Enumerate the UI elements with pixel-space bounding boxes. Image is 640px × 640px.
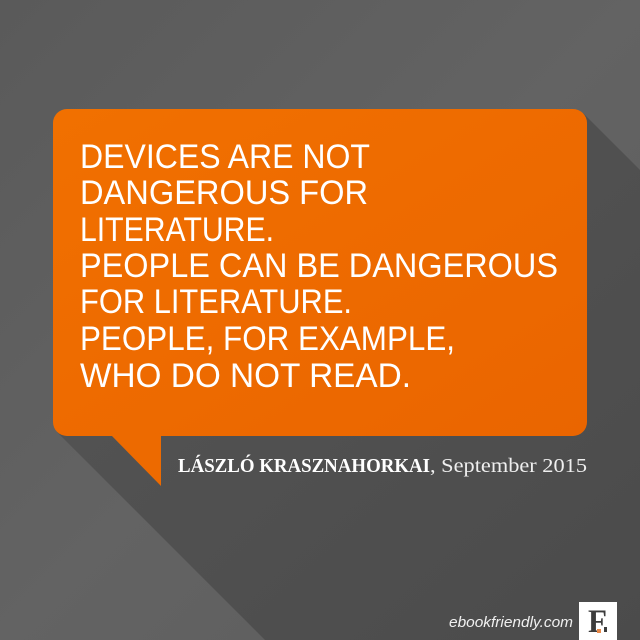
quote text: DANGEROUS FOR — [80, 174, 368, 212]
quote text: FOR LITERATURE. — [80, 283, 352, 321]
attribution: , September 2015 — [430, 455, 587, 477]
logo: F — [588, 604, 607, 640]
site name: ebookfriendly.com — [449, 614, 573, 631]
long shadow of speech bubble — [57, 113, 640, 640]
attribution: LÁSZLÓ KRASZNAHORKAI — [178, 453, 430, 477]
quote text: LITERATURE. — [80, 211, 274, 249]
quote text — [80, 138, 558, 395]
attribution — [178, 453, 587, 477]
logo — [579, 602, 617, 640]
quote text: WHO DO NOT READ. — [80, 357, 411, 395]
quote text: PEOPLE CAN BE DANGEROUS — [80, 247, 558, 285]
quote text: PEOPLE, FOR EXAMPLE, — [80, 320, 455, 358]
speech bubble — [53, 109, 587, 486]
quote text: DEVICES ARE NOT — [80, 138, 370, 176]
